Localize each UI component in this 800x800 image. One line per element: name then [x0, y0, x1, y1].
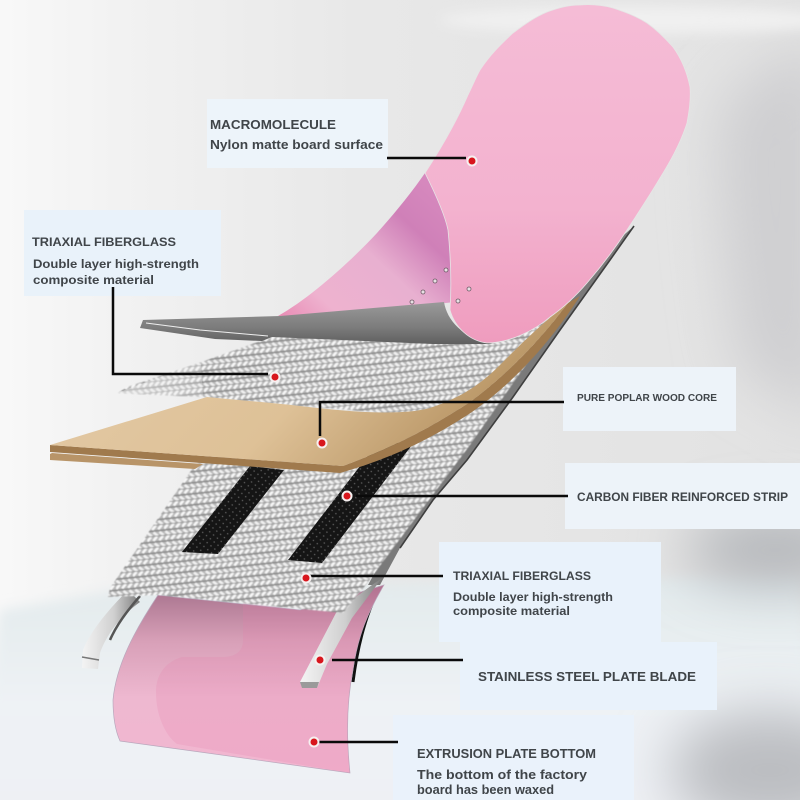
label box: triaxial fiberglass upper: Double layer high-strength	[33, 257, 199, 271]
grey sheet split line	[146, 323, 268, 336]
right blade	[300, 578, 382, 688]
label box: triaxial fiberglass upper	[24, 210, 221, 296]
label box: triaxial fiberglass lower: TRIAXIAL FIBERGLASS	[453, 569, 591, 583]
label box: extrusion plate bottom: board has been waxed	[417, 783, 554, 797]
layer: lower triaxial fiberglass	[108, 258, 600, 613]
callout dots	[270, 156, 476, 746]
label box: triaxial fiberglass lower: composite material	[453, 604, 570, 618]
label box: stainless steel blade	[460, 642, 717, 710]
pink face	[425, 5, 690, 343]
reverse side	[278, 173, 475, 318]
label box: extrusion plate bottom: EXTRUSION PLATE BOTTOM	[417, 746, 596, 761]
leader lines	[113, 158, 568, 742]
grey underside	[140, 302, 493, 344]
layer: extrusion plate bottom	[113, 585, 384, 773]
left blade	[82, 590, 140, 669]
label box: triaxial fiberglass upper: TRIAXIAL FIBERGLASS	[32, 235, 176, 249]
label box: poplar wood core	[563, 367, 736, 431]
layer: carbon fiber strips	[182, 440, 412, 563]
label box: triaxial fiberglass upper: composite material	[33, 273, 154, 287]
label box: carbon fiber strip: CARBON FIBER REINFORCED STRIP	[577, 492, 788, 504]
layer: edge bands along right side	[353, 226, 634, 682]
label box: macromolecule: Nylon matte board surface	[210, 137, 383, 152]
label box: stainless steel blade: STAINLESS STEEL PLATE BLADE	[478, 669, 696, 684]
layer: poplar wood core	[50, 296, 580, 473]
label box: extrusion plate bottom: The bottom of the factory	[417, 768, 587, 782]
layer: upper triaxial fiberglass	[117, 315, 565, 414]
label box: macromolecule: MACROMOLECULE	[210, 117, 336, 132]
layer: stainless steel blades	[82, 578, 382, 688]
layer: macromolecule top surface	[140, 5, 690, 344]
label box: triaxial fiberglass lower	[439, 542, 661, 642]
label box: triaxial fiberglass lower: Double layer high-strength	[453, 590, 613, 604]
label box: carbon fiber strip	[565, 463, 800, 529]
label box: macromolecule	[207, 99, 388, 168]
label box: poplar wood core: PURE POPLAR WOOD CORE	[577, 393, 717, 404]
label box: extrusion plate bottom	[393, 715, 634, 800]
rivets	[410, 268, 471, 304]
